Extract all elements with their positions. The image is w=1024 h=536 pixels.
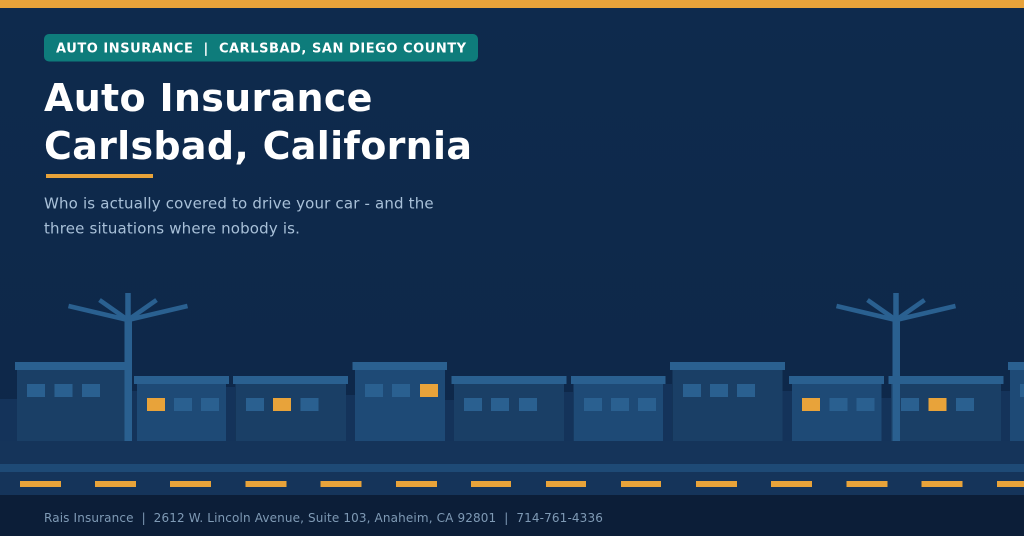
building 2 <box>134 376 229 441</box>
footer bar <box>0 495 1024 536</box>
category badge <box>44 34 478 62</box>
building 5 <box>452 376 566 441</box>
palm tree left <box>68 293 188 441</box>
background skyline <box>0 384 1010 441</box>
palm tree right <box>836 293 956 441</box>
building row <box>15 362 1024 441</box>
sidewalk <box>0 441 1024 464</box>
road dashes <box>20 481 1024 487</box>
subtitle <box>44 194 434 238</box>
building 1 <box>15 362 129 441</box>
building 9 <box>888 376 1004 441</box>
road <box>0 472 1024 495</box>
building 10 <box>1008 362 1024 441</box>
top accent bar <box>0 0 1024 8</box>
subtitle: three situations where nobody is. <box>44 220 300 238</box>
building 7 <box>670 362 785 441</box>
building 6 <box>571 376 666 441</box>
title: Auto Insurance <box>44 76 373 120</box>
category badge: AUTO INSURANCE | CARLSBAD, SAN DIEGO COUNTY <box>56 42 467 56</box>
title: Carlsbad, California <box>44 124 472 168</box>
title <box>44 76 472 168</box>
title underline <box>46 174 153 178</box>
building 4 <box>352 362 447 441</box>
footer text: Rais Insurance | 2612 W. Lincoln Avenue, Suite 103, Anaheim, CA 92801 | 714-761-4336 <box>44 511 603 525</box>
building 8 <box>789 376 884 441</box>
road curb <box>0 464 1024 472</box>
building 3 <box>233 376 348 441</box>
subtitle: Who is actually covered to drive your car - and the <box>44 194 434 212</box>
